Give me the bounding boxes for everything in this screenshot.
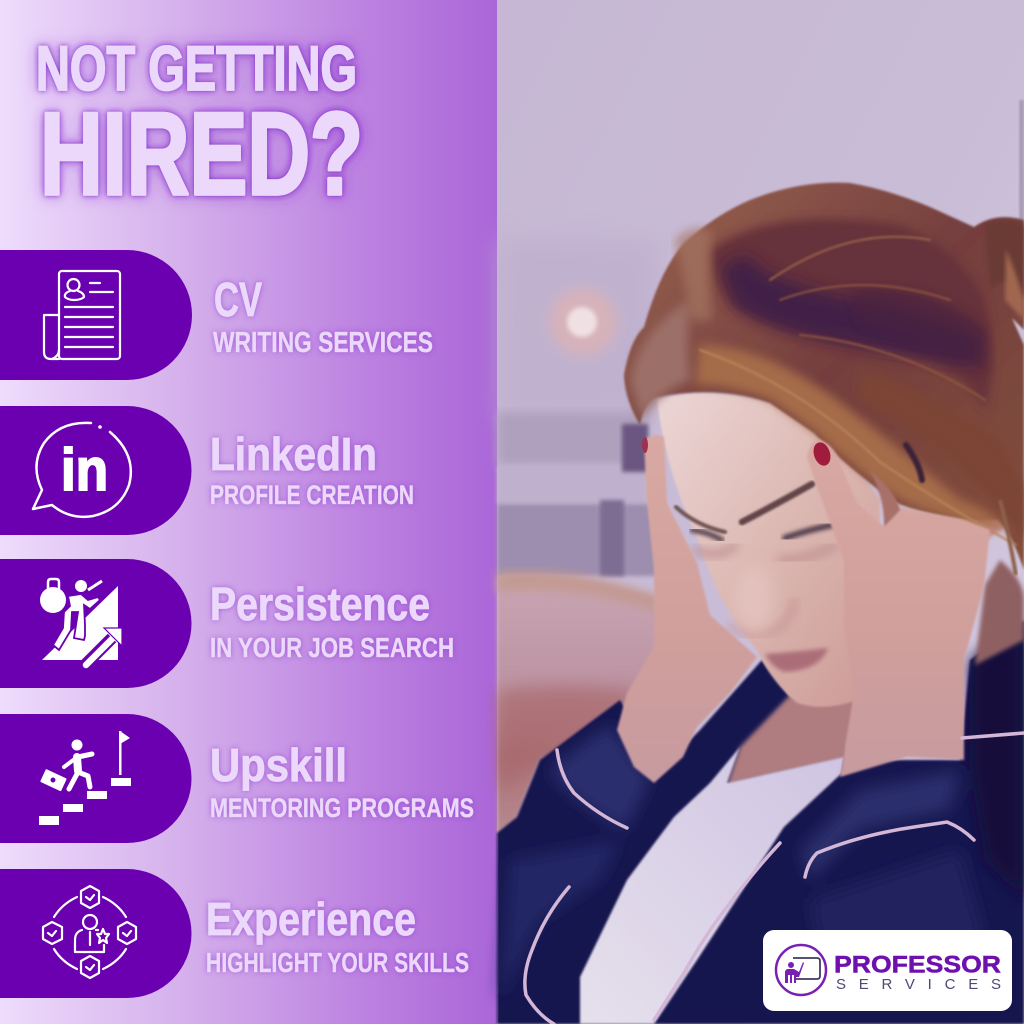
logo emblem [776,945,826,995]
jacket piping [525,733,1024,1024]
Upskill text [210,739,474,823]
Upskill text: Upskill [210,739,347,791]
icon: LinkedIn chat bubble: in [61,437,108,503]
panel: Upskill [0,714,474,843]
nose highlight [735,566,775,634]
Experience text: Experience [206,893,416,945]
panel: CV [0,250,433,380]
Experience text [206,893,469,978]
LinkedIn text [210,428,414,510]
face details [676,484,835,635]
CV text: WRITING SERVICES [213,327,433,359]
title: NOT GETTING [36,34,357,104]
icon: person with skill badges [43,886,136,978]
hair [624,183,1024,570]
CV text: CV [214,274,262,327]
LinkedIn text: LinkedIn [210,428,377,480]
shirt [580,747,844,1024]
background: shelf, table and lamp [497,240,657,576]
background: sofa [497,576,662,835]
hair shading [630,219,1024,540]
logo: Professor Services: SERVICES [836,976,1001,993]
Experience text: HIGHLIGHT YOUR SKILLS [206,947,469,978]
LinkedIn pill [0,406,192,535]
frame edge on wall [1019,100,1024,220]
face [657,393,880,707]
logo: Professor Services [763,930,1012,1011]
LinkedIn text: PROFILE CREATION [210,480,414,510]
icon: person pushing weight uphill [40,579,122,665]
icon: person climbing steps to flag [39,731,131,825]
jacket [497,620,1024,1024]
left hand [617,435,757,783]
icon: LinkedIn chat bubble [33,423,131,517]
title [36,34,363,219]
Persistence text: Persistence [210,578,430,630]
CV text [213,274,433,359]
Upskill text: MENTORING PROGRAMS [210,793,474,823]
panel: LinkedIn [0,406,414,535]
title: HIRED? [40,88,363,219]
hair strands [700,237,1016,545]
panel: Persistence [0,559,454,688]
Experience pill [0,869,192,998]
Persistence pill [0,559,192,688]
panel: Experience [0,869,469,998]
mouth [765,648,828,672]
right hand [807,440,990,777]
Upskill pill [0,714,192,843]
icon: CV document [44,271,120,359]
Persistence text: IN YOUR JOB SEARCH [210,632,454,663]
jacket highlights [500,630,1024,1000]
logo wordmark: PROFESSOR [834,952,1001,978]
CV pill [0,250,192,380]
neck and chest [727,695,860,785]
Persistence text [210,578,454,663]
nail [811,440,833,468]
back of head, ear and hair behind [950,420,1016,540]
photo: stressed woman holding her head [497,0,1024,1024]
left panel background [0,0,497,1024]
